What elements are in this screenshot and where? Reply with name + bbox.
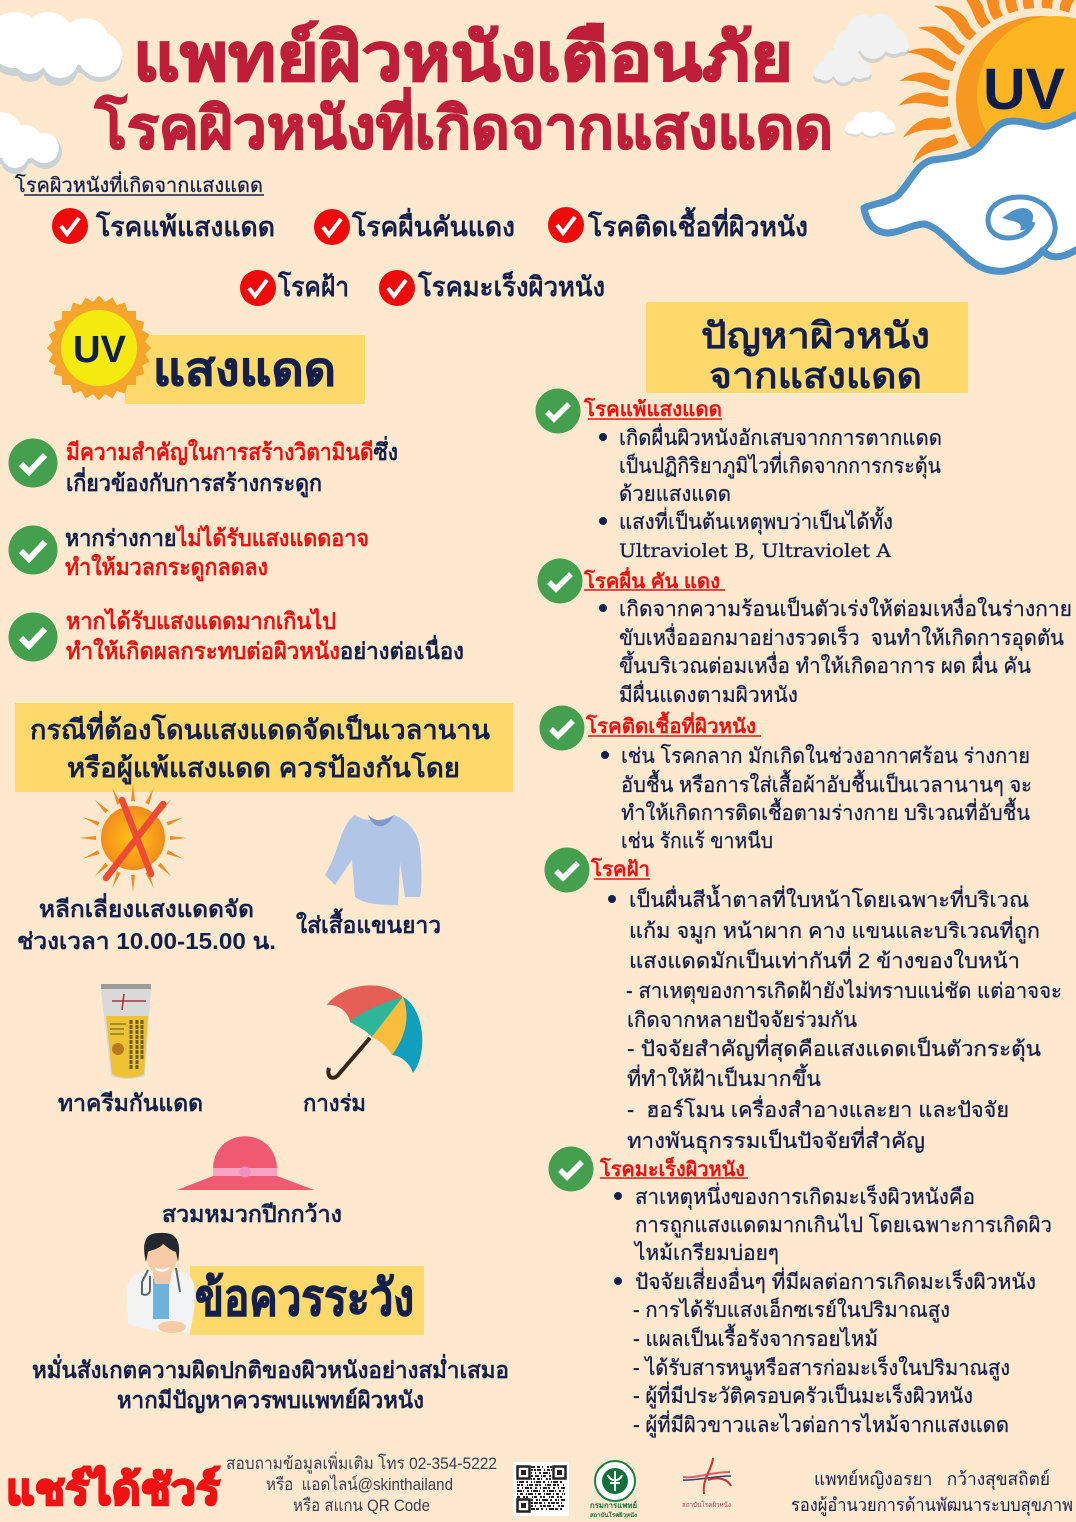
heading: cautions: ข้อควรระวัง — [195, 1270, 414, 1326]
disease checklist — [52, 206, 808, 306]
icon: doctor — [127, 1233, 195, 1333]
text: wear long sleeves: ใส่เสื้อแขนยาว — [296, 908, 441, 938]
icon: long sleeve shirt — [325, 815, 422, 905]
panel: skin infection: เช่น รักแร้ ขาหนีบ — [621, 830, 773, 853]
panel: melasma: ที่ทำให้ฝ้าเป็นมากขึ้น — [627, 1064, 821, 1091]
panel: heat rash: ขึ้นบริเวณต่อมเหงื่อ ทำให้เกิดอาการ ผด ผื่น คัน — [619, 651, 1031, 678]
panel: melasma: - สาเหตุของการเกิดฝ้ายังไม่ทราบแน่ชัด แต่อาจจะ — [626, 979, 1062, 1004]
icon: UV sun badge: UV — [73, 329, 127, 371]
panel: melasma: ทางพันธุกรรมเป็นปัจจัยที่สำคัญ — [627, 1126, 925, 1154]
footer: share slogan: แชร์ได้ชัวร์ — [6, 1465, 220, 1513]
heading: how to protect: กรณีที่ต้องโดนแสงแดดจัดเป็นเวลานาน — [30, 710, 491, 745]
text: apply sunscreen: ทาครีมกันแดด — [58, 1090, 203, 1116]
panel: skin cancer: โรคมะเร็งผิวหนัง — [599, 1156, 745, 1181]
panel: skin cancer: - แผลเป็นเรื้อรังจากรอยไหม้ — [633, 1324, 878, 1351]
panel: sunlight benefits and harms: เกี่ยวข้องกับการสร้างกระดูก — [66, 466, 322, 498]
footer: contact text: หรือ แอดไลน์@skinthailand — [266, 1474, 453, 1494]
footer: contact text — [226, 1451, 497, 1515]
panel: skin cancer: - การได้รับแสงเอ็กซเรย์ในปริมาณสูง — [633, 1296, 950, 1323]
text: open umbrella: กางร่ม — [303, 1090, 366, 1116]
text: avoid strong sun — [17, 892, 276, 954]
disease checklist: โรคฝ้า — [277, 270, 349, 302]
panel: sun allergy: แสงที่เป็นต้นเหตุพบว่าเป็นได้ทั้ง — [619, 507, 893, 535]
panel: heat rash — [538, 558, 1072, 707]
icon: department of medical services logo: กรมการแพทย์ — [590, 1500, 637, 1510]
cloud: left middle — [0, 112, 62, 174]
panel: melasma: แสงแดดมักเป็นเท่ากันที่ 2 ข้างของใบหน้า — [629, 946, 1020, 973]
panel: sun allergy: เกิดผื่นผิวหนังอักเสบจากการตากแดด — [619, 423, 942, 450]
heading: skin problems from sunlight — [646, 302, 968, 396]
title — [94, 20, 833, 161]
panel: skin cancer: ปัจจัยเสี่ยงอื่นๆ ที่มีผลต่อการเกิดมะเร็งผิวหนัง — [635, 1267, 1036, 1294]
text: caution advice: หมั่นสังเกตความผิดปกติของผิวหนังอย่างสม่ำเสมอ — [32, 1353, 509, 1383]
heading: skin problems from sunlight: ปัญหาผิวหนัง — [701, 315, 930, 357]
panel: sunlight benefits and harms: ทำให้เกิดผลกระทบต่อผิวหนังอย่างต่อเนื่อง — [66, 634, 464, 664]
disease checklist: โรคแพ้แสงแดด — [95, 210, 275, 242]
panel: sun allergy: เป็นปฏิกิริยาภูมิไวที่เกิดจากการกระตุ้น — [619, 451, 941, 479]
footer: contact text: หรือ สแกน QR Code — [293, 1496, 430, 1515]
panel: heat rash: โรคผื่น คัน แดง — [583, 566, 720, 593]
panel: skin cancer: - ผู้ที่มีผิวขาวและไวต่อการไหม้จากแสงแดด — [633, 1410, 1009, 1438]
footer: doctor signature — [791, 1469, 1073, 1516]
panel: heat rash: เกิดจากความร้อนเป็นตัวเร่งให้ต่อมเหงื่อในร่างกาย — [619, 594, 1072, 621]
panel: skin cancer: ไหม้เกรียมบ่อยๆ — [633, 1241, 779, 1265]
icon: QR code — [513, 1462, 569, 1516]
title: โรคผิวหนังที่เกิดจากแสงแดด — [94, 87, 833, 161]
text: avoid strong sun: ช่วงเวลา 10.00-15.00 น. — [17, 928, 276, 954]
panel: skin infection: อับชื้น หรือการใส่เสื้อผ้าอับชื้นเป็นเวลานานๆ จะ — [621, 770, 1032, 797]
panel: skin infection: โรคติดเชื้อที่ผิวหนัง — [585, 711, 756, 738]
panel: sun allergy: ด้วยแสงแดด — [619, 483, 731, 506]
heading: how to protect — [15, 703, 513, 792]
text: caution advice: หากมีปัญหาควรพบแพทย์ผิวหนัง — [117, 1387, 424, 1414]
heading: skin problems from sunlight: จากแสงแดด — [709, 355, 922, 396]
panel: skin cancer: - ผู้ที่มีประวัติครอบครัวเป็นมะเร็งผิวหนัง — [633, 1381, 973, 1409]
heading: sunlight: แสงแดด — [153, 343, 336, 395]
icon: wide-brim hat — [177, 1136, 314, 1190]
panel: skin infection — [540, 706, 1032, 853]
text: avoid strong sun: หลีกเลี่ยงแสงแดดจัด — [39, 892, 254, 922]
cloud: large white with blue outline — [864, 113, 1076, 271]
panel: melasma — [544, 848, 1062, 1154]
icon: umbrella — [327, 985, 422, 1078]
panel: heat rash: ขับเหงื่อออกมาอย่างรวดเร็ว จนทำให้เกิดการอุดตัน — [619, 623, 1064, 651]
footer: contact text: สอบถามข้อมูลเพิ่มเติม โทร 02-354-5222 — [226, 1451, 497, 1474]
panel: skin infection: ทำให้เกิดการติดเชื้อตามร่างกาย บริเวณที่อับชื้น — [621, 798, 1030, 825]
icon: department of medical services logo: สถาบันโรคผิวหนัง — [590, 1511, 637, 1519]
panel: melasma: - ปัจจัยสำคัญที่สุดคือแสงแดดเป็นตัวกระตุ้น — [627, 1034, 1041, 1062]
panel: skin cancer: การถูกแสงแดดมากเกินไป โดยเฉพาะการเกิดผิว — [635, 1213, 1052, 1238]
title: แพทย์ผิวหนังเตือนภัย — [133, 20, 793, 94]
panel: sunlight benefits and harms: ทำให้มวลกระดูกลดลง — [65, 553, 268, 582]
panel: skin infection: เช่น โรคกลาก มักเกิดในช่วงอากาศร้อน ร่างกาย — [621, 744, 1030, 768]
subheading: list of skin diseases: โรคผิวหนังที่เกิดจากแสงแดด — [15, 171, 263, 197]
disease checklist: โรคมะเร็งผิวหนัง — [417, 269, 605, 302]
disease checklist: โรคผื่นคันแดง — [351, 207, 515, 242]
icon: department of medical services logo — [590, 1461, 637, 1519]
icon: institute of dermatology logo — [682, 1458, 731, 1509]
panel: sun allergy: โรคแพ้แสงแดด — [583, 397, 722, 421]
panel: melasma: โรคฝ้า — [590, 857, 650, 881]
panel: skin cancer: สาเหตุหนึ่งของการเกิดมะเร็งผิวหนังคือ — [635, 1182, 975, 1210]
panel: sun allergy — [536, 388, 942, 562]
panel: sunlight benefits and harms — [8, 435, 464, 664]
footer: doctor signature: แพทย์หญิงอรยา กว้างสุขสถิตย์ — [814, 1469, 1050, 1490]
panel: melasma: แก้ม จมูก หน้าผาก คาง แขนและบริเวณที่ถูก — [629, 916, 1040, 944]
panel: melasma: - ฮอร์โมน เครื่องสำอางและยา และปัจจัย — [627, 1095, 1009, 1122]
panel: sunlight benefits and harms: หากได้รับแสงแดดมากเกินไป — [66, 607, 336, 634]
icon: crossed-out sun — [79, 784, 187, 892]
text: caution advice — [32, 1353, 509, 1414]
heading: sunlight — [125, 335, 365, 404]
panel: melasma: เกิดจากหลายปัจจัยร่วมกัน — [627, 1009, 857, 1032]
cloud: centre small group — [813, 14, 909, 138]
panel: melasma: เป็นผื่นสีน้ำตาลที่ใบหน้าโดยเฉพาะที่บริเวณ — [629, 885, 1029, 912]
text: wear wide-brim hat: สวมหมวกปีกกว้าง — [162, 1201, 342, 1227]
sun with UV: UV — [983, 57, 1065, 122]
panel: sun allergy: Ultraviolet B, Ultraviolet A — [619, 540, 891, 562]
icon: UV sun badge — [47, 296, 151, 400]
icon: institute of dermatology logo: สถาบันโรคผิวหนัง — [682, 1500, 731, 1509]
sun with UV — [898, 0, 1076, 184]
heading: how to protect: หรือผู้แพ้แสงแดด ควรป้องกันโดย — [67, 751, 460, 785]
icon: sunscreen tube — [101, 984, 151, 1079]
panel: heat rash: มีผื่นแดงตามผิวหนัง — [619, 680, 798, 707]
panel: sunlight benefits and harms: มีความสำคัญในการสร้างวิตามินดีซึ่ง — [66, 435, 398, 466]
disease checklist: โรคติดเชื้อที่ผิวหนัง — [587, 206, 808, 242]
cloud: top left — [0, 12, 122, 86]
panel: skin cancer — [548, 1146, 1052, 1438]
panel: sunlight benefits and harms: หากร่างกายไม่ได้รับแสงแดดอาจ — [65, 524, 369, 551]
panel: skin cancer: - ได้รับสารหนูหรือสารก่อมะเร็งในปริมาณสูง — [633, 1354, 1010, 1381]
